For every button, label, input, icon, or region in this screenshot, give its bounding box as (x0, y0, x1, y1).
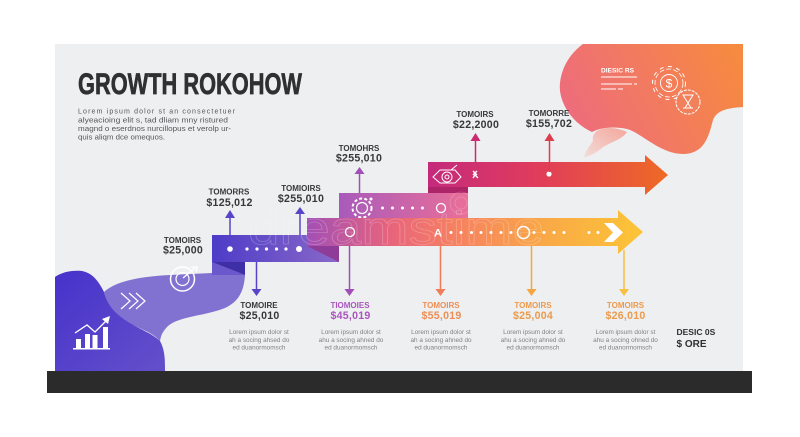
label up: $155,702: $155,702 (526, 118, 572, 130)
step 4 arrow: red to orange (428, 155, 668, 195)
footer note (676, 327, 716, 350)
label down: $25,010: ed duanormomsch (233, 344, 286, 352)
label down: $55,019: Lorem ipsum dolor st (411, 329, 471, 336)
label up: $255,010 upper: $255,010 (336, 152, 382, 164)
label: $25,000: $25,000 (163, 244, 203, 256)
intro text block: quis aliqm dce omequos. (78, 134, 165, 142)
intro text block: magnd o eserdnos nurcillopus et verolp ur- (78, 126, 232, 133)
speech tail (584, 128, 627, 157)
label down: $25,010: TOMOIRE (240, 301, 278, 310)
label up: $155,702 (526, 109, 572, 172)
icon group: top right heading and gears: $ (666, 76, 673, 90)
label down: $45,019: ed duanormomsch (325, 344, 378, 352)
icon group: top right heading and gears: DIESIC RS (601, 68, 634, 74)
label up: $22,2000: $22,2000 (453, 119, 499, 131)
label down: $25,010 (229, 262, 290, 352)
label down: $26,010: Lorem ipsum dolor st (596, 329, 656, 336)
label down: $26,010: ed duanormomsch (599, 344, 652, 352)
label down: $26,010 (593, 250, 658, 352)
watermark: dreamstime (248, 202, 544, 254)
label down: $25,004 (501, 246, 566, 352)
label up: $125,012: TOMORRS (209, 188, 250, 196)
fold: purple (307, 246, 339, 262)
step 2 arrow: purple to yellow (307, 210, 643, 254)
label down: $55,019: ah a socing ahned do (410, 337, 472, 344)
blob: top right (560, 44, 743, 154)
step 3 bar: pink purple (339, 193, 468, 219)
label up: $22,2000 (453, 110, 499, 162)
label up: $155,702: TOMORRE (529, 109, 570, 118)
blob: dark blue corner (55, 271, 165, 371)
step 1 bar: blue (212, 235, 339, 275)
label down: $26,010: TOMOIRS (607, 301, 645, 310)
label: $25,000: TOMOIRS (164, 236, 202, 245)
label: $25,000 (163, 236, 203, 256)
label down: $45,019: TIOMOIES (330, 301, 370, 310)
label down: $25,010: Lorem ipsum dolor st (229, 329, 289, 336)
icon: triple chevrons (121, 293, 145, 309)
icon: target (170, 267, 197, 291)
label up: $255,010: TOMIOIRS (281, 184, 321, 193)
label up: $255,010 upper (336, 144, 382, 193)
label up: $22,2000: TOMOIRS (456, 110, 494, 119)
label down: $25,004: ahu a socing ahned do (501, 337, 566, 344)
label down: $26,010: $26,010 (605, 310, 646, 322)
label down: $26,010: ahu a socing ohned do (593, 337, 658, 344)
icon group: top right heading and gears (601, 66, 700, 114)
base bar (47, 371, 752, 393)
intro text block: alyeacioing elit s, tad dliam mny ristured (78, 118, 228, 124)
label down: $45,019: Lorem ipsum dolor st (321, 329, 381, 336)
intro text block (78, 108, 236, 142)
label down: $25,004: $25,004 (513, 310, 553, 322)
label up: $125,012: $125,012 (206, 197, 253, 209)
label down: $45,019: $45,019 (330, 310, 371, 322)
footer note: $ ORE (676, 339, 707, 350)
blob: light purple path (104, 262, 245, 341)
footer note: DESIC 0S (676, 327, 716, 337)
icon: growth chart (73, 316, 110, 350)
step 2 arrow: purple to yellow: A (434, 228, 442, 240)
label down: $25,010: $25,010 (239, 310, 280, 322)
title: GROWTH ROKOHOW (78, 68, 302, 101)
label up: $255,010 upper: TOMOHRS (339, 144, 380, 153)
background panel (55, 44, 743, 371)
label down: $25,004: ed duanormomsch (507, 344, 560, 352)
label down: $45,019: ahu a socing ahned do (319, 337, 384, 344)
label down: $55,019: TOMOIRS (422, 301, 460, 310)
label down: $25,004: TOMOIRS (514, 301, 552, 310)
label down: $55,019: ed duanormomsch (415, 344, 468, 352)
label down: $25,010: ah a socing ahsed do (229, 337, 290, 344)
label up: $125,012 (206, 188, 253, 235)
label down: $55,019: $55,019 (421, 310, 462, 322)
watermark (248, 192, 544, 254)
label down: $25,004: Lorem ipsum dolor st (503, 329, 563, 336)
label up: $255,010: $255,010 (278, 193, 324, 205)
label up: $255,010 (278, 184, 324, 235)
label down: $55,019 (410, 246, 472, 352)
intro text block: Lorem ipsum dolor st an consectetuer (78, 108, 236, 116)
label down: $45,019 (319, 246, 384, 352)
